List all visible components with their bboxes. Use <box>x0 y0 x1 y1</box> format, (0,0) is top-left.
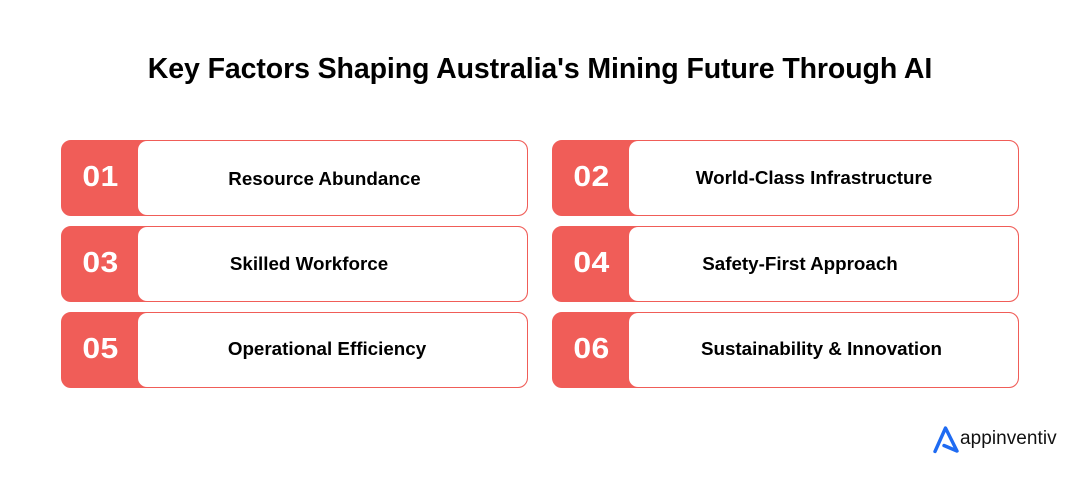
card 03: Skilled Workforce <box>61 226 528 302</box>
label panel: Operational Efficiency <box>138 313 527 387</box>
label panel: World-Class Infrastructure <box>629 141 1018 215</box>
logo: appinventiv <box>933 426 1057 454</box>
label panel: Safety-First Approach <box>629 227 1018 301</box>
label panel: Resource Abundance <box>138 141 527 215</box>
label panel: Sustainability & Innovation <box>629 313 1018 387</box>
number 05: 05 <box>82 333 119 365</box>
card 02: World-Class Infrastructure <box>552 140 1019 216</box>
label panel: Operational Efficiency: Operational Efficiency <box>228 338 426 359</box>
number 02: 02 <box>573 161 610 193</box>
number 04: 04 <box>573 247 610 279</box>
icon: logo arrow <box>933 426 959 454</box>
label panel: Skilled Workforce <box>138 227 527 301</box>
number 01: 01 <box>82 161 119 193</box>
number 03: 03 <box>82 247 119 279</box>
card 06: Sustainability & Innovation <box>552 312 1019 388</box>
label panel: Safety-First Approach: Safety-First Approach <box>702 253 898 274</box>
title: Key Factors Shaping Australia's Mining Future Through AI <box>148 53 932 85</box>
label panel: Sustainability & Innovation: Sustainability & Innovation <box>701 338 942 359</box>
label panel: Skilled Workforce: Skilled Workforce <box>230 253 388 274</box>
logo wordmark: appinventiv <box>960 428 1057 449</box>
card 04: Safety-First Approach <box>552 226 1019 302</box>
label panel: Resource Abundance: Resource Abundance <box>228 168 421 189</box>
card 01: Resource Abundance <box>61 140 528 216</box>
label panel: World-Class Infrastructure: World-Class Infrastructure <box>696 167 932 188</box>
card 05: Operational Efficiency <box>61 312 528 388</box>
number 06: 06 <box>573 333 610 365</box>
